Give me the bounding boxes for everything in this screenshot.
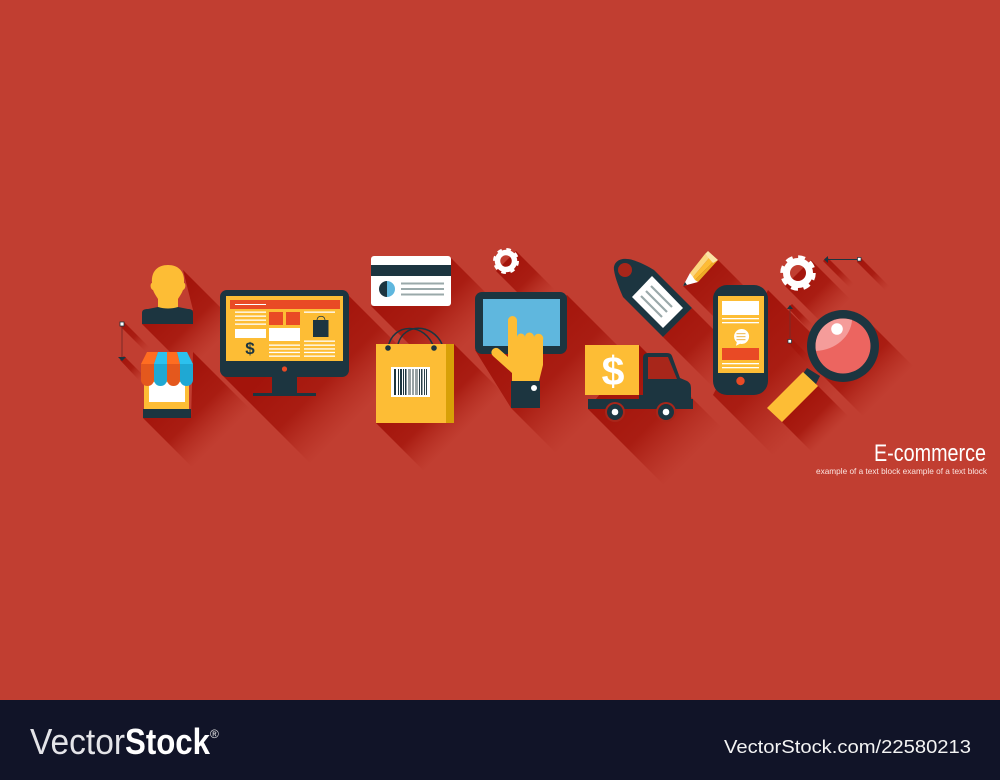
icon: pencil [683,251,718,286]
icon: person [142,265,193,324]
caption text block: example of a text block example of a text block [816,466,988,476]
icon: price tag [614,259,692,337]
icon: large gear [782,257,814,289]
icon: small gear [494,250,518,272]
footer logo: Vector [30,721,125,762]
footer logo [30,721,219,762]
icon: desktop monitor: $ [245,339,255,358]
icon: tablet with pointing hand [475,292,567,408]
icon: shopping bag [376,328,454,423]
icon: top right anchor handle [824,256,861,263]
barcode [391,367,430,397]
icon: smartphone [713,285,768,395]
footer logo: Stock [125,721,211,762]
icon: storefront [141,352,193,418]
footer logo: ® [210,727,219,741]
footer image id: VectorStock.com/22580213 [724,737,971,757]
footer band [0,700,1000,780]
icon: magnifier anchor handle [787,305,793,343]
icon: left anchor handle [118,322,126,361]
icon: credit card [371,256,451,306]
icon: desktop monitor [220,290,349,396]
icon: delivery truck: $ [602,348,625,394]
icon: magnifying glass [767,310,879,422]
icon: delivery truck [585,345,693,422]
